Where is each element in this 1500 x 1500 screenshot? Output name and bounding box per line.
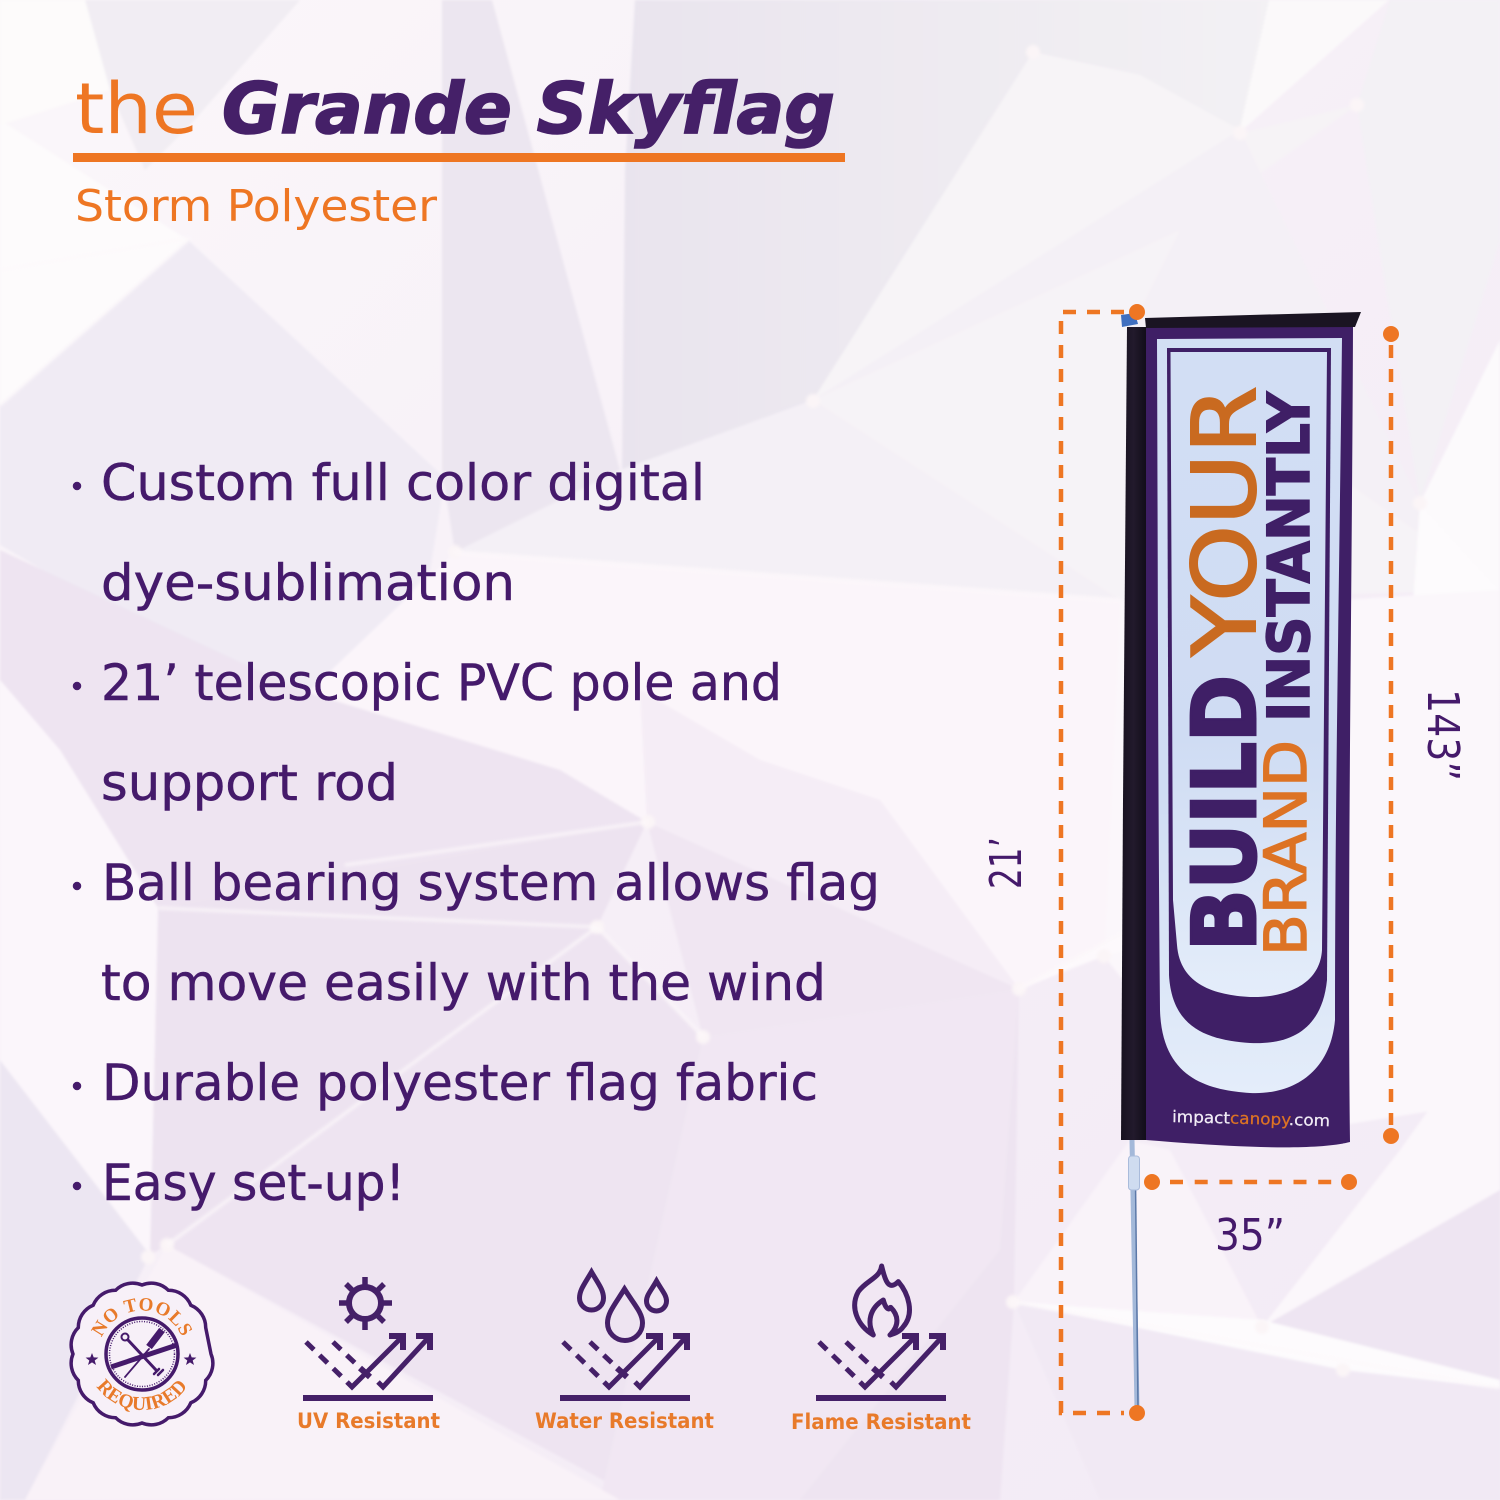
label: flame resistant: Flame Resistant xyxy=(791,1410,971,1434)
reflection arrows xyxy=(560,1336,690,1398)
flag banner xyxy=(1121,312,1361,1147)
feature bullet list: to move easily with the wind xyxy=(101,954,826,1012)
feature bullet list: Easy set-up! xyxy=(102,1154,405,1212)
flag body xyxy=(1146,326,1353,1147)
water drops xyxy=(580,1272,666,1340)
icon: crossed tools xyxy=(111,1330,177,1377)
black pole sleeve xyxy=(1121,327,1146,1140)
feature bullet list: 21’ telescopic PVC pole and xyxy=(101,654,782,712)
top black hem xyxy=(1145,312,1361,328)
feature bullet list: dye-sublimation xyxy=(101,554,515,612)
icon: uv resistant xyxy=(303,1277,433,1398)
feature bullet list: Custom full color digital xyxy=(101,454,705,512)
title: Grande Skyflag xyxy=(222,68,835,150)
flag pole xyxy=(1121,313,1140,1408)
badge: no tools required xyxy=(69,1281,215,1427)
icon: flame resistant xyxy=(816,1266,946,1398)
flame xyxy=(855,1266,909,1335)
dimension: 143 inch flag height: 143” xyxy=(1417,689,1468,781)
dimension: 35 inch flag width xyxy=(1144,1174,1357,1261)
reflection arrows xyxy=(303,1336,433,1398)
feature bullet list xyxy=(73,454,880,1212)
badge: no tools required: NO TOOLS xyxy=(90,1298,192,1338)
inner light area xyxy=(1170,352,1327,997)
purple inner outline and U band xyxy=(1167,348,1331,1043)
feature bullet list: Ball bearing system allows flag xyxy=(102,854,880,912)
title: the xyxy=(75,68,198,150)
flag text: build your: BUILD xyxy=(1174,675,1276,951)
feature bullet list: Durable polyester flag fabric xyxy=(102,1054,818,1112)
icon: water resistant xyxy=(560,1272,690,1398)
dimension: 21 foot height xyxy=(981,304,1145,1421)
flag text: brand instantly xyxy=(1252,391,1323,956)
subtitle: Storm Polyester xyxy=(75,181,438,232)
reflection arrows xyxy=(816,1336,946,1398)
label: uv resistant: UV Resistant xyxy=(297,1409,440,1433)
flag text: brand instantly: BRAND xyxy=(1252,740,1320,956)
sun xyxy=(339,1277,392,1330)
flag text: brand instantly: INSTANTLY xyxy=(1255,391,1323,722)
light panel xyxy=(1157,338,1342,1093)
feature bullet list: support rod xyxy=(101,754,398,812)
icon: stars xyxy=(86,1353,196,1365)
label: water resistant: Water Resistant xyxy=(535,1409,714,1433)
dimension: 143 inch flag height xyxy=(1383,326,1468,1144)
dimension: 35 inch flag width: 35” xyxy=(1215,1210,1285,1261)
dimension: 21 foot height: 21’ xyxy=(981,837,1032,889)
title underline xyxy=(73,153,845,162)
flag text: build your: YOUR xyxy=(1174,386,1276,657)
badge: no tools required: REQUIRED xyxy=(96,1378,186,1412)
flag text: build your xyxy=(1174,386,1276,951)
flag url: impactcanopy.com xyxy=(1172,1107,1330,1130)
